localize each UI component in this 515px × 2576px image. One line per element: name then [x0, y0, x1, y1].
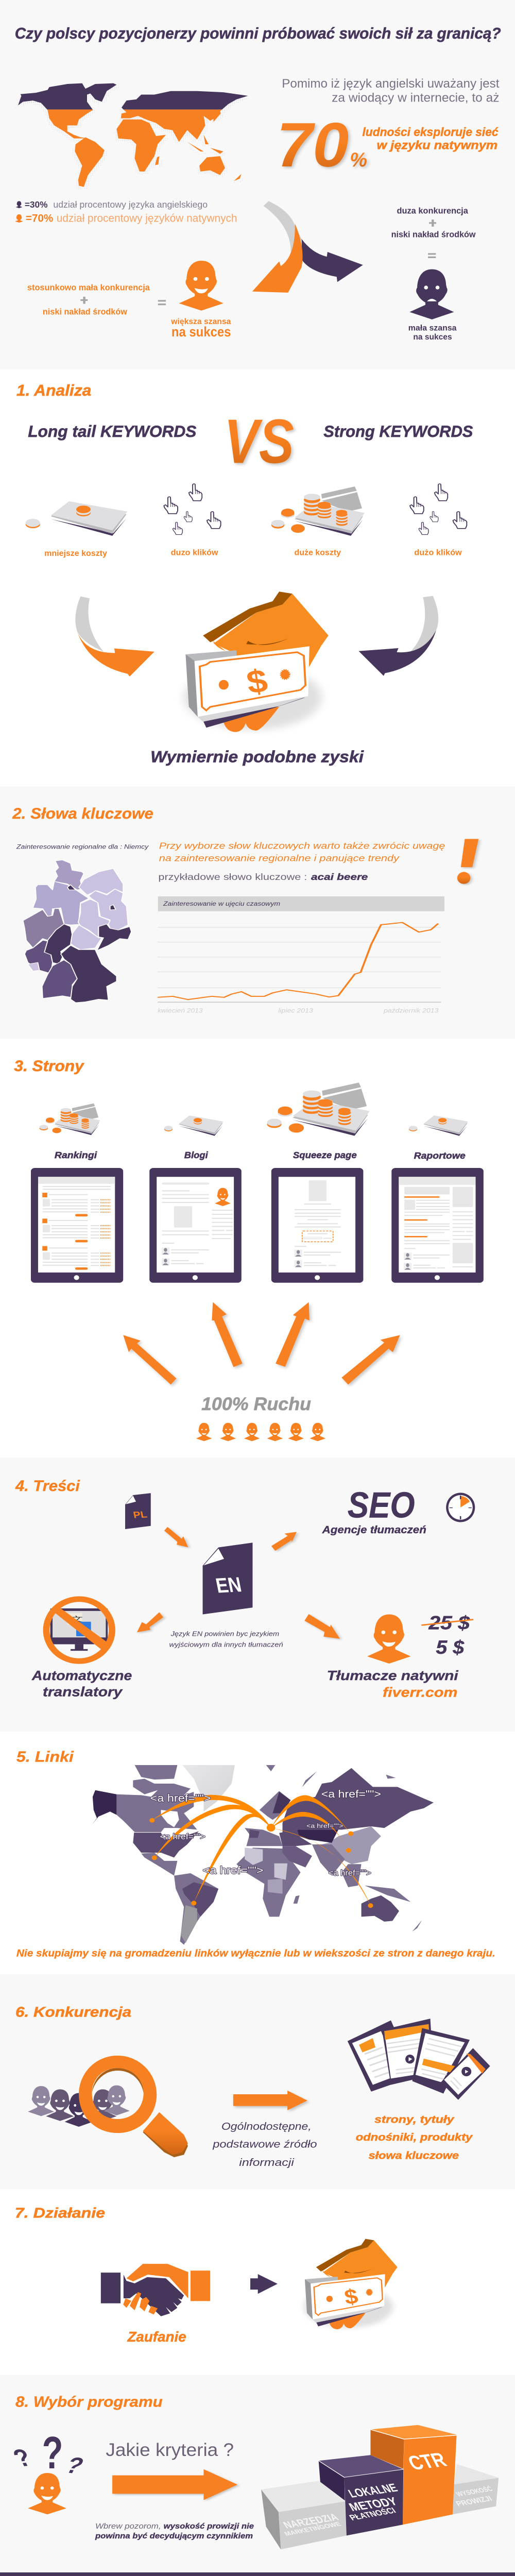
x axis labels: kwiecień 2013 [158, 1007, 203, 1014]
icon: sad head [409, 269, 454, 319]
icon: money blogi [164, 1115, 224, 1136]
tablet: rankings [31, 1168, 123, 1283]
callout: native language [362, 125, 499, 151]
native translators label: fiverr.com [383, 1685, 457, 1700]
map of Germany [23, 860, 131, 1003]
link labels: <a href=""> [329, 1869, 371, 1877]
findings text [356, 2113, 473, 2162]
arrows: translation flow [137, 1527, 340, 1639]
footer [0, 2572, 515, 2576]
link labels: <a href=""> [306, 1823, 344, 1829]
page type labels: Raportowe [414, 1151, 466, 1161]
native translators label [327, 1668, 458, 1700]
panel: 2. Słowa kluczowe [12, 806, 478, 1014]
small chance text: mała szansa [408, 324, 457, 333]
icon: hand holding money [184, 591, 329, 732]
icon: money rankingi [40, 1104, 100, 1135]
block: narzedzia [261, 2481, 347, 2549]
block: local payment methods: PŁATNOŚCI [347, 2506, 398, 2522]
panel: 4. Treści [15, 1478, 475, 1700]
link labels: <a href=""> [321, 1788, 381, 1800]
podium chart [261, 2425, 499, 2549]
icons: question marks [8, 2427, 88, 2479]
icons: question marks: ? [61, 2452, 88, 2479]
labels: duże koszty [294, 548, 341, 557]
findings text: strony, tytuły [374, 2113, 455, 2125]
note: Ogólnodostępne, [221, 2121, 312, 2132]
automatic translators label: translatory [43, 1685, 123, 1700]
note: powinna być decydującym czynnikiem [95, 2532, 253, 2540]
heading: 1. Analiza [16, 382, 91, 399]
icons: question marks: ? [42, 2427, 63, 2478]
labels: mniejsze koszty [44, 549, 107, 558]
icon: PL document: PL [132, 1509, 148, 1520]
note [95, 2522, 254, 2540]
note: podstawowe źródło [212, 2139, 317, 2150]
page type labels: Rankingi [55, 1150, 97, 1161]
curved split arrow [252, 201, 363, 293]
icon: EN document: EN [214, 1573, 244, 1598]
right outcome: high competition: duza konkurencja [397, 207, 469, 216]
icon: clock [446, 1493, 475, 1522]
heading: 5. Linki [16, 1748, 74, 1765]
block: CTR [370, 2425, 457, 2524]
labels: dużo klików [414, 548, 462, 557]
panel: 5. Linki [16, 1748, 495, 1959]
arrows: traffic [123, 1302, 400, 1384]
icon: big money [271, 486, 365, 536]
example keyword: acai beere [311, 872, 368, 882]
legend: 70 percent [15, 212, 237, 224]
page type labels: Squeeze page [293, 1150, 357, 1161]
link labels: <a href=""> [203, 1864, 264, 1876]
icon: no machine translators: 文 [70, 1616, 83, 1623]
chart title bar [158, 896, 444, 911]
icons: question marks: ? [8, 2444, 36, 2472]
findings text: odnośniki, produkty [356, 2131, 473, 2143]
left outcome: low competition: stosunkowo mała konkurencja [27, 283, 150, 293]
right outcome: high competition [391, 207, 476, 258]
block: narzedzia: MARKETINGOWE [283, 2520, 342, 2537]
icons: audience heads [196, 1423, 325, 1441]
note [169, 1631, 283, 1649]
tablet: blog [149, 1168, 242, 1283]
icon: no machine translators: A [80, 1625, 89, 1633]
arrow: left curve [75, 597, 154, 676]
arrow [233, 2091, 307, 2110]
icon: money squeeze [267, 1082, 370, 1136]
automatic translators label: Automatyczne [31, 1668, 132, 1683]
link labels [150, 1788, 381, 1877]
map title: Zainteresowanie regionalne dla : Niemcy [16, 843, 149, 850]
x axis labels: październik 2013 [383, 1007, 438, 1014]
long tail heading: Long tail KEYWORDS [28, 422, 196, 440]
icon: cursors right [410, 484, 467, 535]
panel: 4. Treści: SEO [348, 1485, 415, 1526]
icon: exclamation mark [457, 839, 478, 884]
arrow [250, 2274, 278, 2294]
prices [421, 1612, 473, 1658]
link arcs [149, 1795, 373, 1908]
prices: 25 $ [428, 1612, 470, 1634]
legend: 30 percent [16, 200, 208, 210]
bigger chance text: większa szansa [170, 317, 231, 326]
panel: 8. Wybór programu [8, 2393, 499, 2549]
automatic translators label [31, 1668, 132, 1700]
x axis labels: lipiec 2013 [278, 1007, 313, 1014]
bigger chance text: na sukces [171, 324, 231, 340]
left outcome: low competition: niski nakład środków [43, 308, 127, 317]
panel: 1. Analiza [16, 382, 473, 766]
icon: cursors left [164, 484, 221, 535]
big number 70 percent: % [350, 148, 367, 171]
heading 6: 6. Konkurencja [15, 2004, 131, 2020]
advice text [159, 840, 445, 863]
icon: PL document [125, 1493, 151, 1529]
left outcome: low competition [27, 283, 166, 317]
VS: VS [224, 406, 294, 477]
icon: money raportowe [409, 1115, 468, 1136]
icon: device stack [348, 2019, 490, 2100]
icon: native translator head [367, 1615, 410, 1664]
heading: 2. Słowa kluczowe [12, 806, 153, 822]
labels [44, 548, 462, 558]
tablet: report [391, 1168, 484, 1283]
right outcome: high competition: niski nakład środków [391, 230, 476, 240]
trend line [158, 923, 438, 999]
page type labels: Blogi [184, 1150, 208, 1161]
big number 70 percent: 70 [277, 110, 349, 180]
prices: 5 $ [436, 1637, 465, 1658]
agencies label: Agencje tłumaczeń [322, 1523, 426, 1536]
block: local payment methods [319, 2455, 403, 2535]
arrow: right curve [358, 596, 438, 676]
icon: hand holding money [304, 2239, 398, 2329]
icon: EN document [203, 1543, 252, 1615]
small chance text: na sukces [413, 333, 452, 342]
block: local payment methods: METODY [347, 2495, 400, 2514]
icon: small money [26, 501, 127, 536]
example keyword: przykładowe słowo kluczowe : [158, 872, 307, 882]
bigger chance text [170, 317, 231, 340]
icon: thinking head [28, 2473, 66, 2514]
panel: 3. Strony [14, 1057, 484, 1441]
world map split by language share [15, 83, 251, 190]
tablet: squeeze page [271, 1168, 363, 1283]
block: CTR: CTR [404, 2448, 450, 2475]
traffic label: 100% Ruchu [201, 1394, 311, 1414]
labels: duzo klików [171, 548, 218, 557]
block: narzedzia: NARZĘDZIA [281, 2512, 341, 2531]
icon: handshake [101, 2264, 210, 2316]
page type labels [55, 1150, 466, 1161]
findings text: słowa kluczowe [369, 2150, 459, 2162]
x axis labels [158, 1007, 438, 1014]
note: wysokość prowizji nie [164, 2522, 254, 2531]
icon: no machine translators [43, 1596, 115, 1664]
block: local payment methods: LOKALNE [346, 2481, 400, 2500]
panels: 6. Konkurencja and 7. Działanie [15, 2004, 490, 2345]
small chance text [408, 324, 457, 342]
panel: intro [15, 25, 501, 342]
strong heading: Strong KEYWORDS [323, 422, 473, 440]
heading 7: 7. Działanie [15, 2205, 105, 2221]
question text: Jakie kryteria ? [106, 2439, 234, 2460]
heading: 4. Treści [15, 1478, 80, 1495]
trust label: Zaufanie [127, 2328, 186, 2345]
world choropleth map [92, 1765, 434, 1945]
note: informacji [239, 2157, 295, 2168]
arrow [112, 2469, 237, 2500]
heading: 8. Wybór programu [15, 2393, 163, 2410]
chart title bar: Zainteresowanie w ujęciu czasowym [163, 900, 280, 907]
note: Język EN powinien byc jezykiem [170, 1631, 279, 1638]
legend: 70 percent: udział procentowy języków natywnych [57, 212, 237, 224]
block: prowizja [453, 2464, 499, 2514]
icon: magnifier [79, 2056, 188, 2157]
note: wyjściowym dla innych tłumaczeń [169, 1641, 283, 1649]
legend: 30 percent: udział procentowy języka angielskiego [53, 200, 208, 210]
trend chart [158, 896, 444, 1014]
icon: happy head [179, 261, 224, 311]
link labels: <a href=""> [160, 1833, 205, 1841]
caption: Wymiernie podobne zyski [150, 748, 364, 766]
legend: 70 percent: =70% [26, 212, 54, 224]
icons: competitor heads [28, 2086, 130, 2127]
link labels: <a href=""> [150, 1792, 211, 1804]
legend: 30 percent: =30% [25, 200, 48, 210]
note [212, 2121, 317, 2168]
note: Wbrew pozorom, [95, 2522, 161, 2531]
heading: 3. Strony [14, 1057, 84, 1075]
